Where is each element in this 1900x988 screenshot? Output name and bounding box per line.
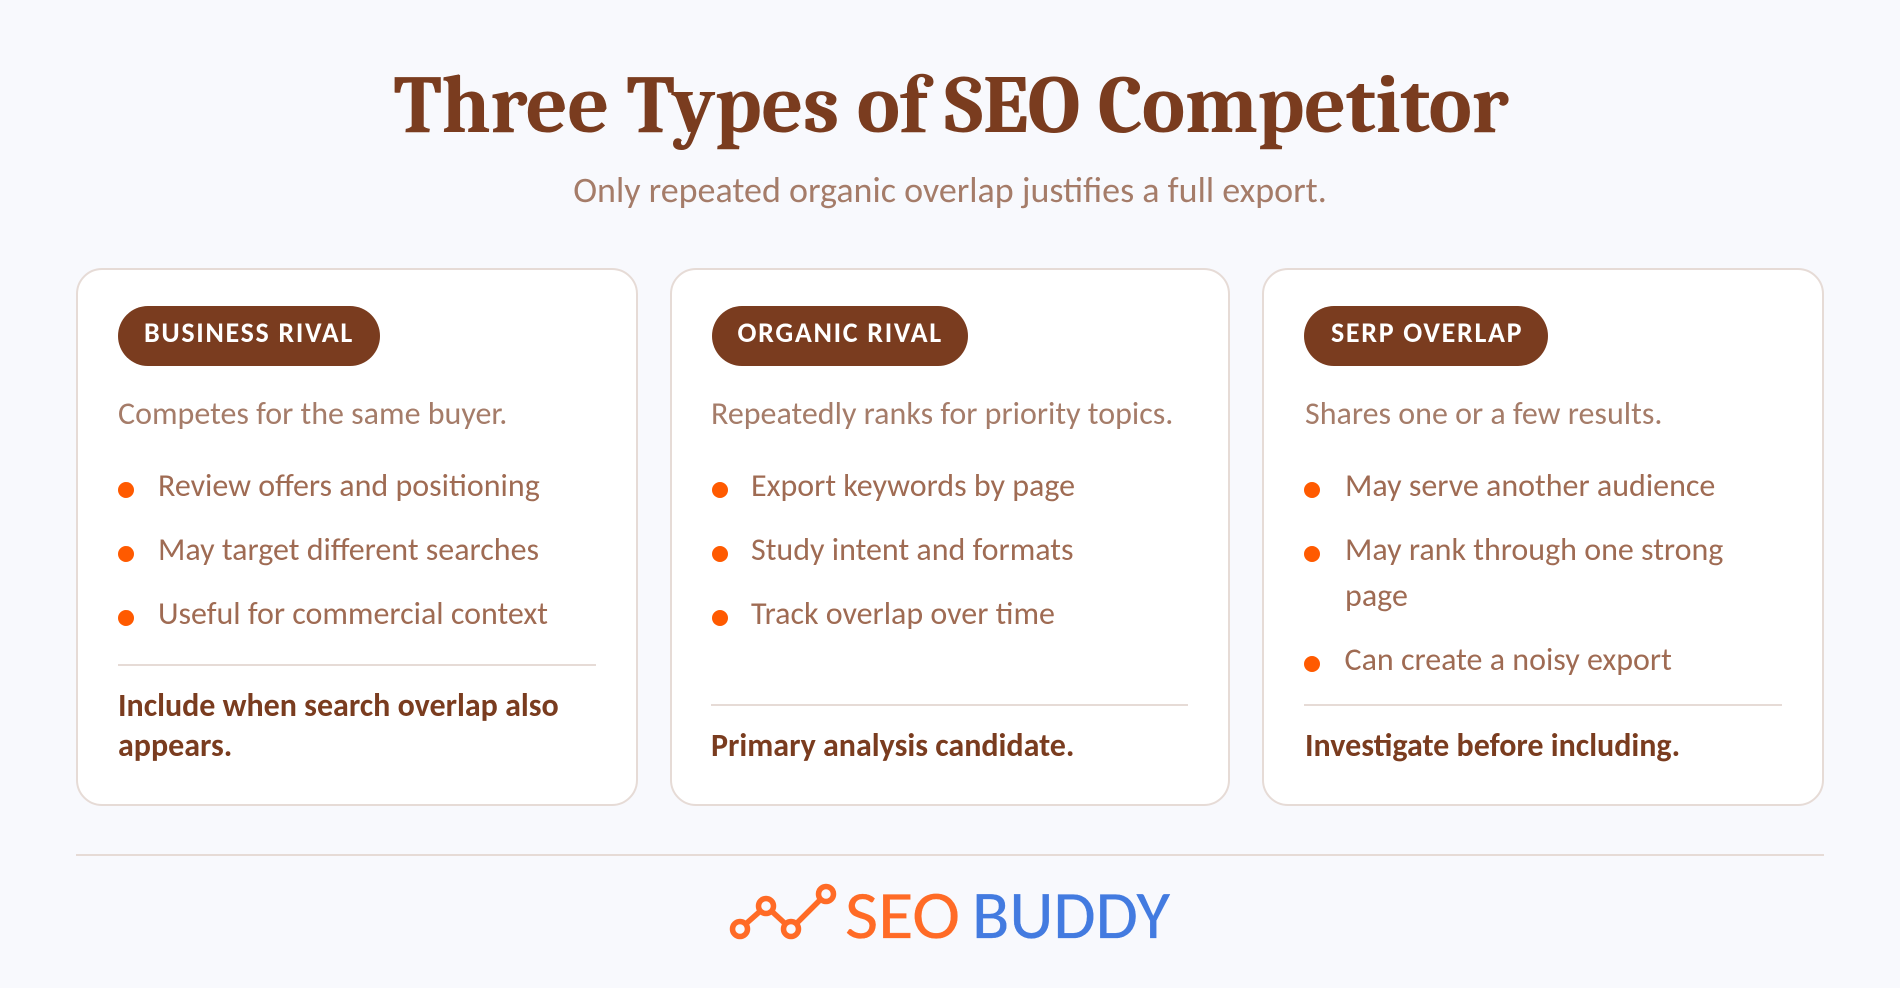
badge: organic rival	[712, 306, 968, 366]
description: business rival: Competes for the same buyer.	[118, 394, 507, 433]
wordmark: SEO	[845, 874, 960, 957]
bullet marker 2	[1304, 546, 1320, 562]
bullet text 2: page	[1345, 576, 1408, 615]
bullet text 1: May serve another audience	[1345, 466, 1715, 505]
description: organic rival: Repeatedly ranks for priority topics.	[711, 394, 1173, 433]
badge: business rival	[118, 306, 380, 366]
bullet text 3: Can create a noisy export	[1344, 640, 1672, 679]
bullet text 2	[1345, 530, 1723, 615]
panel: organic rival	[670, 268, 1230, 806]
bullet text 3: Track overlap over time	[751, 594, 1055, 633]
bullet marker 3	[1304, 656, 1320, 672]
bullet marker 3	[118, 610, 134, 626]
verdict: business rival	[118, 686, 559, 765]
verdict: business rival: Include when search overlap also	[118, 686, 559, 725]
verdict: business rival: appears.	[118, 726, 232, 765]
bullet text 2: May target different searches	[158, 530, 539, 569]
subtitle: Only repeated organic overlap justifies a full export.	[573, 168, 1327, 212]
bullet text 2: Study intent and formats	[751, 530, 1074, 569]
verdict: organic rival: Primary analysis candidate.	[711, 726, 1074, 765]
bullet text 2: May rank through one strong	[1345, 530, 1723, 569]
badge: serp overlap	[1304, 306, 1548, 366]
badge: organic rival: ORGANIC RIVAL	[738, 315, 943, 350]
bullet marker 1	[1304, 482, 1320, 498]
icon: rising line chart	[732, 886, 834, 936]
title: Three Types of SEO Competitor	[394, 58, 1508, 153]
badge: serp overlap: SERP OVERLAP	[1331, 315, 1523, 350]
bullet marker 2	[712, 546, 728, 562]
wordmark: BUDDY	[972, 874, 1171, 957]
bullet marker 3	[712, 610, 728, 626]
bullet text 3: Useful for commercial context	[158, 594, 548, 633]
bullet marker 1	[712, 482, 728, 498]
bullet marker 1	[118, 482, 134, 498]
bullet marker 2	[118, 546, 134, 562]
panel: serp overlap	[1262, 268, 1824, 806]
badge: business rival: BUSINESS RIVAL	[144, 315, 354, 350]
logo: SEO Buddy	[730, 874, 1171, 957]
panel: business rival	[76, 268, 638, 806]
verdict: serp overlap: Investigate before including.	[1305, 726, 1680, 765]
description: serp overlap: Shares one or a few results.	[1305, 394, 1662, 433]
bullet text 1: Review offers and positioning	[158, 466, 540, 505]
bullet text 1: Export keywords by page	[751, 466, 1075, 505]
wordmark	[845, 874, 1171, 957]
